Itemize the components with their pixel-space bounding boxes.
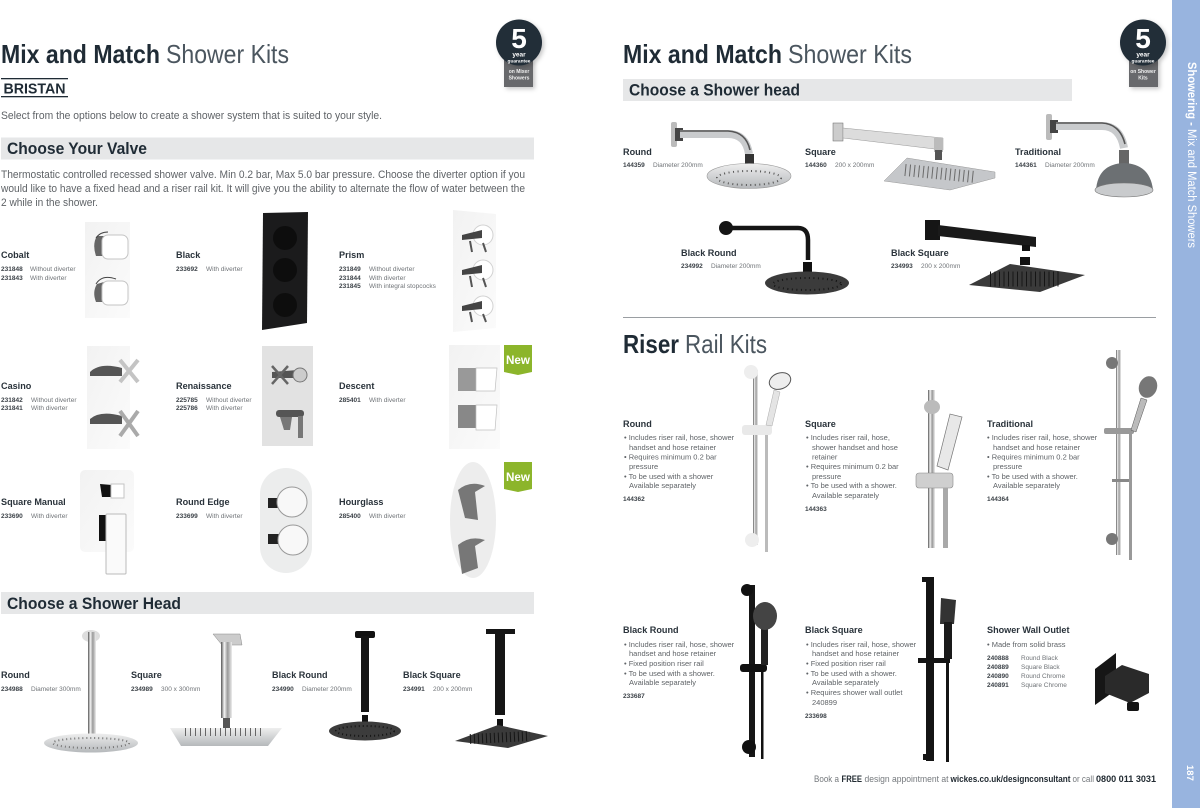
outlet: Shower Wall Outlet: 240891: [987, 682, 1009, 689]
new flash: Descent: [504, 345, 532, 375]
valve: Black: [176, 212, 308, 330]
valve: Renaissance: Without diverter: [206, 397, 252, 404]
badge: 5 year guarantee on shower kits: 5: [1135, 23, 1151, 54]
footer: design appointment: 0800 011 3031: [1096, 773, 1156, 784]
riser kit: Square: • Requires minimum 0.2 bar: [806, 462, 899, 471]
footer: design appointment: or call: [1072, 773, 1094, 784]
footer: design appointment: Book a: [814, 773, 840, 784]
badge: 5 year guarantee on shower kits: Kits: [1138, 76, 1148, 82]
intro text: Select from the options below to create a shower system that is suited to your style.: [1, 110, 382, 122]
title: Mix and Match Shower Kits: Mix and Match: [1, 39, 160, 69]
wall head: Round: [623, 122, 791, 188]
badge: 5 year guarantee on mixer showers: guarantee: [508, 58, 531, 64]
wall head: Round: Diameter 200mm: [653, 162, 703, 169]
riser kit: Traditional: [987, 350, 1160, 560]
heading bar: Choose a Shower Head: [1, 592, 534, 614]
valve: Cobalt: Without diverter: [30, 266, 76, 273]
valve: Prism: Prism: [339, 250, 364, 260]
wall head: Traditional: 144361: [1015, 162, 1037, 169]
riser kit: Black Square: Black Square: [805, 625, 863, 635]
riser kit: Square: • To be used with a shower.: [806, 481, 897, 490]
logo: Bristan: BRISTAN: [4, 82, 66, 98]
ceiling head: Round: Diameter 300mm: [31, 686, 81, 693]
badge: 5 year guarantee on mixer showers: year: [512, 52, 526, 58]
outlet: Shower Wall Outlet: Round Chrome: [1021, 673, 1065, 680]
valve: Hourglass: With diverter: [369, 513, 406, 520]
valve: Prism: With integral stopcocks: [369, 283, 437, 290]
valve: Cobalt: 231848: [1, 266, 23, 273]
riser kit: Square: retainer: [812, 452, 838, 462]
wall head: Square: Square: [805, 147, 836, 157]
riser kit: Black Round: [623, 584, 777, 759]
outlet: Shower Wall Outlet: 240890: [987, 673, 1009, 680]
valve: Black: With diverter: [206, 266, 243, 273]
riser kit: Black Round: Available separately: [629, 678, 696, 687]
outlet: Shower Wall Outlet: • Made from solid brass: [987, 640, 1066, 649]
page number: 187: [1184, 765, 1195, 781]
heading bar: Choose a Shower head: [623, 79, 1072, 101]
ceiling head: Black Square: [403, 629, 548, 748]
ceiling head: Square: 300 x 300mm: [161, 686, 200, 693]
badge: 5 year guarantee on mixer showers: [496, 20, 542, 87]
riser kit: Square: 144363: [805, 506, 827, 513]
valve: Square Manual: With diverter: [31, 513, 68, 520]
riser kit: Traditional: • Includes riser rail, hose, shower: [987, 433, 1098, 442]
new flash: Hourglass: New: [506, 470, 531, 484]
riser kit: Black Round: • To be used with a shower.: [624, 669, 715, 678]
riser kit: Black Square: [805, 577, 956, 762]
valve: Prism: With diverter: [369, 275, 406, 282]
valve: Descent: 285401: [339, 397, 361, 404]
riser kit: Square: [805, 390, 962, 548]
title: Mix and Match Shower Kits: Mix and Match: [623, 39, 782, 69]
valve: Casino: With diverter: [31, 405, 68, 412]
outlet: Shower Wall Outlet: Square Chrome: [1021, 682, 1067, 689]
valve: Renaissance: 225785: [176, 397, 198, 404]
valve: Cobalt: Cobalt: [1, 250, 29, 260]
riser kit: Round: pressure: [629, 462, 658, 471]
panel: right page shower heads and riser rail kits: [623, 20, 1166, 784]
wall head: Traditional: Traditional: [1015, 147, 1061, 157]
ceiling head: Square: [131, 634, 282, 746]
title: Riser Rail Kits: Riser: [623, 329, 679, 359]
valve: Round Edge: 233699: [176, 513, 198, 520]
riser kit: Square: Available separately: [812, 491, 879, 500]
badge: 5 year guarantee on shower kits: [1120, 20, 1166, 87]
outlet: Shower Wall Outlet: Round Black: [1021, 655, 1059, 662]
valve: Casino: Casino: [1, 381, 32, 391]
valve: Descent: Descent: [339, 381, 374, 391]
wall head: Black Square: [891, 220, 1085, 292]
sidebar: section tab: Showering - Mix and Match Showers: [1185, 62, 1197, 248]
valve: Renaissance: [176, 346, 313, 446]
heading bar: Choose Your Valve: [1, 138, 534, 160]
riser kit: Traditional: Traditional: [987, 419, 1033, 429]
wall head: Round: Round: [623, 147, 652, 157]
heading bar: Choose a Shower Head: Choose a Shower Head: [7, 594, 181, 613]
riser kit: Black Square: • Includes riser rail, hose, shower: [806, 640, 917, 649]
wall head: Traditional: Diameter 200mm: [1045, 162, 1095, 169]
riser kit: Traditional: • To be used with a shower.: [987, 472, 1078, 481]
outlet: Shower Wall Outlet: 240888: [987, 655, 1009, 662]
valve: Cobalt: With diverter: [30, 275, 67, 282]
valve: Square Manual: 233690: [1, 513, 23, 520]
heading bar: Choose Your Valve: Choose Your Valve: [7, 139, 147, 158]
outlet: Shower Wall Outlet: Shower Wall Outlet: [987, 625, 1070, 635]
wall head: Round: 144359: [623, 162, 645, 169]
valve: Black: Black: [176, 250, 201, 260]
wall head: Black Round: Diameter 200mm: [711, 263, 761, 270]
wall head: Square: 144360: [805, 162, 827, 169]
wall head: Square: 200 x 200mm: [835, 162, 874, 169]
valve: Casino: Without diverter: [31, 397, 77, 404]
riser kit: Traditional: pressure: [993, 462, 1022, 471]
wall head: Black Square: Black Square: [891, 248, 949, 258]
riser kit: Black Round: handset and hose retainer: [629, 649, 717, 658]
panel: left page valves and shower heads: [0, 20, 548, 752]
valve description: would like to have a fixed head and a riser rail kit. It will give you the ability to alternate the flow of water between the: [0, 183, 525, 195]
valve: Hourglass: [339, 462, 496, 578]
riser kit: Traditional: 144364: [987, 496, 1009, 503]
new flash: Descent: New: [506, 353, 531, 367]
riser kit: Round: 144362: [623, 496, 645, 503]
valve: Square Manual: [1, 470, 134, 574]
valve: Round Edge: [176, 468, 312, 573]
riser kit: Round: [623, 365, 793, 552]
outlet: Shower Wall Outlet: 240889: [987, 664, 1009, 671]
footer: design appointment: wickes.co.uk/designconsultant: [950, 773, 1070, 784]
wall head: Square: [805, 123, 995, 190]
title: Mix and Match Shower Kits: Shower Kits: [788, 39, 912, 69]
valve: Cobalt: 231843: [1, 275, 23, 282]
ceiling head: Square: Square: [131, 670, 162, 680]
riser kit: Round: handset and hose retainer: [629, 443, 717, 452]
title: Riser Rail Kits: [623, 329, 767, 359]
ceiling head: Round: Round: [1, 670, 30, 680]
valve: Prism: 231844: [339, 275, 361, 282]
valve description: 2 while in the shower.: [1, 197, 98, 209]
riser kit: Round: Round: [623, 419, 652, 429]
title: Riser Rail Kits: Rail Kits: [685, 329, 767, 359]
riser kit: Black Round: Black Round: [623, 625, 679, 635]
valve: Renaissance: With diverter: [206, 405, 243, 412]
ceiling head: Black Round: Diameter 200mm: [302, 686, 352, 693]
badge: 5 year guarantee on mixer showers: 5: [511, 23, 527, 54]
ceiling head: Black Square: 234991: [403, 686, 425, 693]
ceiling head: Black Square: 200 x 200mm: [433, 686, 472, 693]
valve: Renaissance: Renaissance: [176, 381, 232, 391]
sidebar: section tab: [1172, 0, 1200, 808]
title: Mix and Match Shower Kits: [1, 39, 289, 69]
valve: Prism: 231845: [339, 283, 361, 290]
riser kit: Black Round: • Includes riser rail, hose, shower: [624, 640, 735, 649]
valve: Hourglass: 285400: [339, 513, 361, 520]
badge: 5 year guarantee on shower kits: guarantee: [1132, 58, 1155, 64]
wall head: Black Square: 200 x 200mm: [921, 263, 960, 270]
badge: 5 year guarantee on shower kits: on Shower: [1130, 69, 1156, 75]
valve: Casino: 231842: [1, 397, 23, 404]
valve: Renaissance: 225786: [176, 405, 198, 412]
riser kit: Round: Available separately: [629, 481, 696, 490]
valve: Round Edge: Round Edge: [176, 497, 230, 507]
riser kit: Square: Square: [805, 419, 836, 429]
valve: Descent: [339, 345, 500, 449]
riser kit: Round: • Includes riser rail, hose, shower: [624, 433, 735, 442]
riser kit: Black Square: Available separately: [812, 678, 879, 687]
riser kit: Square: shower handset and hose: [812, 443, 898, 452]
riser kit: Black Square: 233698: [805, 713, 827, 720]
valve: Square Manual: Square Manual: [1, 497, 66, 507]
outlet: Shower Wall Outlet: [987, 625, 1149, 711]
badge: 5 year guarantee on shower kits: year: [1136, 52, 1150, 58]
valve: Black: 233692: [176, 266, 198, 273]
riser kit: Black Square: 240899: [812, 698, 837, 707]
ceiling head: Square: 234989: [131, 686, 153, 693]
footer: design appointment: design appointment at: [864, 773, 949, 784]
footer: design appointment: [814, 773, 1156, 784]
wall head: Black Round: [681, 221, 849, 294]
valve: Round Edge: With diverter: [206, 513, 243, 520]
new flash: Hourglass: [504, 462, 532, 492]
riser kit: Square: pressure: [812, 472, 841, 481]
riser kit: Black Square: • Requires shower wall outlet: [806, 688, 903, 697]
riser kit: Black Round: 233687: [623, 693, 645, 700]
ceiling head: Black Round: [272, 631, 401, 740]
riser kit: Traditional: handset and hose retainer: [993, 443, 1081, 452]
riser kit: Round: • Requires minimum 0.2 bar: [624, 452, 717, 462]
ceiling head: Black Square: Black Square: [403, 670, 461, 680]
valve: Prism: Without diverter: [369, 266, 415, 273]
riser kit: Round: • To be used with a shower: [624, 472, 714, 481]
valve: Cobalt: [1, 222, 130, 318]
valve description: Thermostatic controlled recessed shower valve. Min 0.2 bar, Max 5.0 bar pressure. Choose the diverter option if you: [1, 169, 525, 181]
title: Mix and Match Shower Kits: Shower Kits: [166, 39, 289, 69]
footer: design appointment: FREE: [842, 773, 862, 784]
valve: Hourglass: Hourglass: [339, 497, 383, 507]
title: Mix and Match Shower Kits: [623, 39, 912, 69]
wall head: Black Square: 234993: [891, 263, 913, 270]
riser kit: Black Round: • Fixed position riser rail: [624, 659, 704, 668]
valve: Prism: 231849: [339, 266, 361, 273]
outlet: Shower Wall Outlet: Square Black: [1021, 664, 1060, 671]
wall head: Black Round: 234992: [681, 263, 703, 270]
ceiling head: Round: 234988: [1, 686, 23, 693]
riser kit: Black Square: • To be used with a shower.: [806, 669, 897, 678]
valve: Descent: With diverter: [369, 397, 406, 404]
valve: Prism: [339, 210, 496, 332]
ceiling head: Black Round: Black Round: [272, 670, 328, 680]
riser kit: Black Square: handset and hose retainer: [812, 649, 900, 658]
heading bar: Choose a Shower head: Choose a Shower head: [629, 80, 800, 100]
riser kit: Black Square: • Fixed position riser rail: [806, 659, 886, 668]
wall head: Traditional: [1015, 114, 1153, 197]
riser kit: Traditional: Available separately: [993, 481, 1060, 490]
valve description: [0, 169, 525, 209]
valve: Casino: 231841: [1, 405, 23, 412]
badge: 5 year guarantee on mixer showers: on Mixer: [509, 69, 529, 75]
riser kit: Traditional: • Requires minimum 0.2 bar: [987, 452, 1080, 462]
divider: [623, 317, 1156, 318]
wall head: Black Round: Black Round: [681, 248, 737, 258]
ceiling head: Black Round: 234990: [272, 686, 294, 693]
riser kit: Square: • Includes riser rail, hose,: [806, 433, 890, 442]
ceiling head: Round: [1, 630, 138, 752]
valve: Casino: [1, 346, 138, 449]
badge: 5 year guarantee on mixer showers: Showers: [509, 76, 530, 82]
